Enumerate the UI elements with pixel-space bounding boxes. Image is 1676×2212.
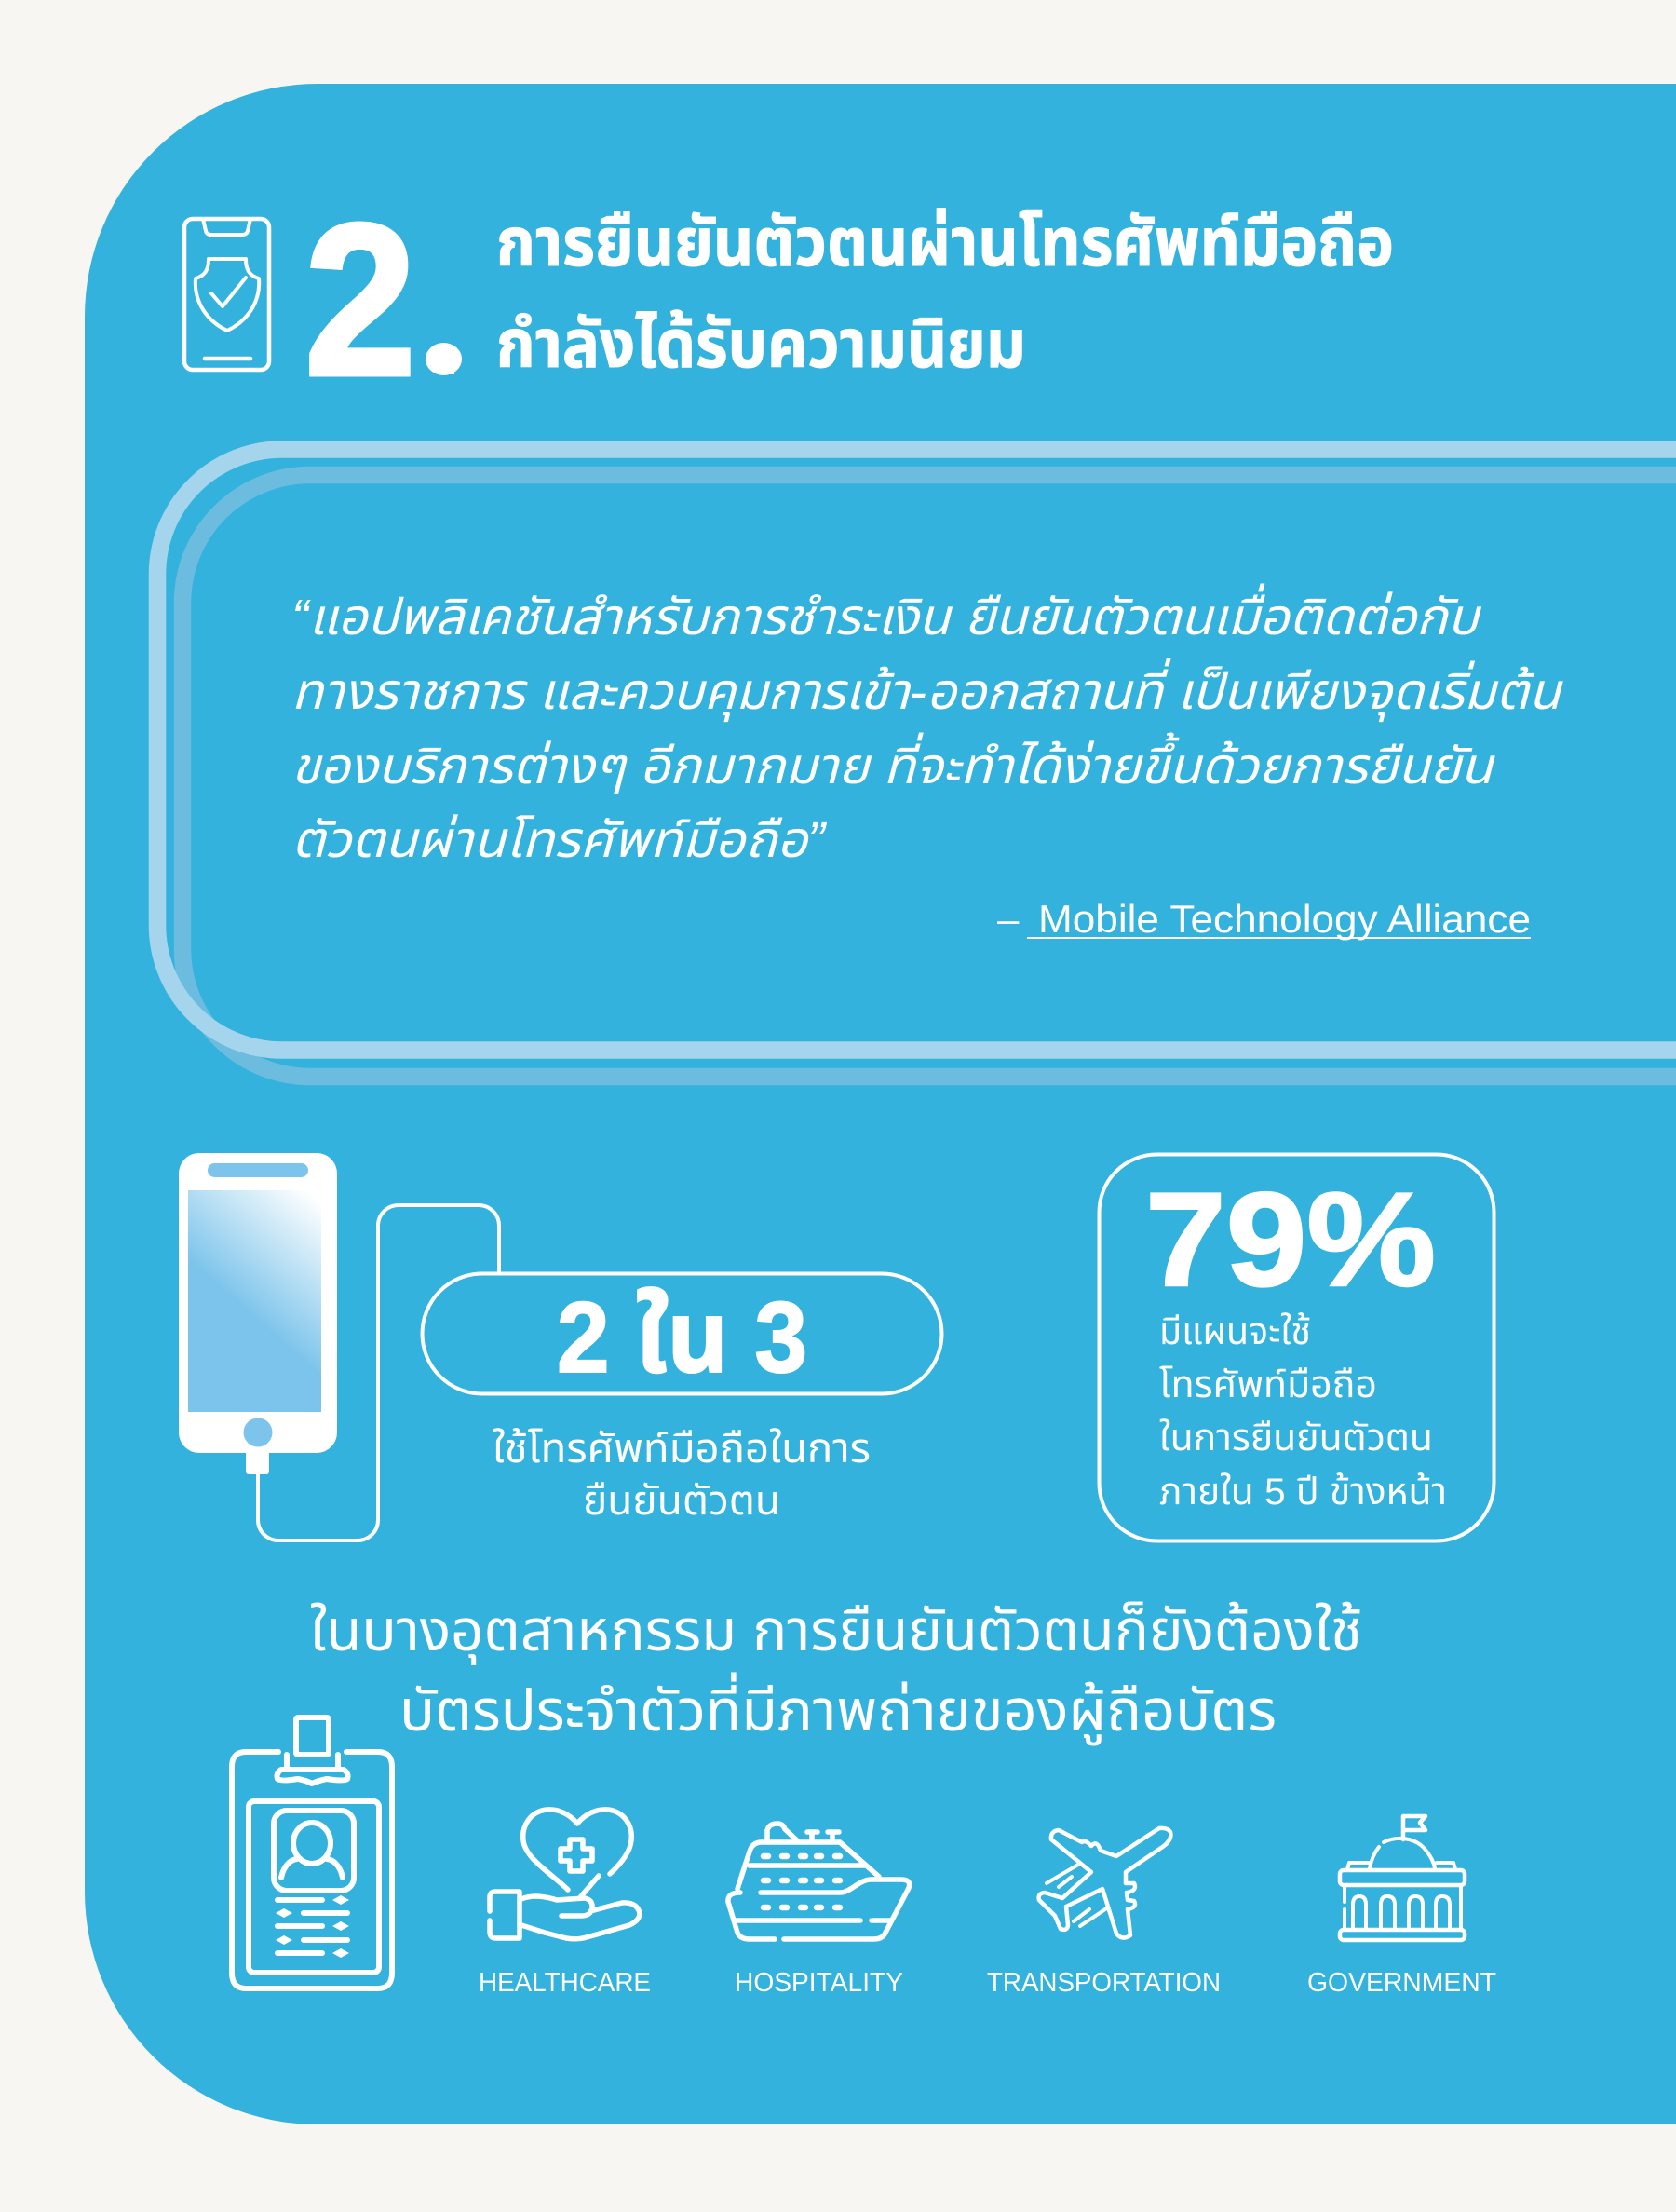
panel: quote frame lines [157, 449, 1676, 1077]
stat pill: 2 in 3 [423, 1274, 942, 1393]
quote text: “แอปพลิเคชันสำหรับการชำระเงิน ยืนยันตัวตนเมื่อติดต่อกับ [291, 583, 1481, 645]
quote text: ตัวตนผ่านโทรศัพท์มือถือ” [291, 812, 827, 868]
icon: ID badge [232, 1717, 392, 1988]
section number 2.: 2 [304, 180, 416, 421]
quote text: ของบริการต่างๆ อีกมากมาย ที่จะทำได้ง่ายขึ้นด้วยการยืนยัน [291, 732, 1495, 794]
heading: industries [310, 1599, 1362, 1746]
title: การยืนยันตัวตนผ่านโทรศัพท์มือถือ [496, 206, 1394, 280]
icon: transportation airplane [1039, 1828, 1170, 1938]
title: กำลังได้รับความนิยม [496, 307, 1026, 382]
heading: industries: ในบางอุตสาหกรรม การยืนยันตัวตนก็ยังต้องใช้ [310, 1599, 1362, 1665]
illustration: phone with charging cable [179, 1153, 499, 1540]
stat caption: ใช้โทรศัพท์มือถือในการ [493, 1426, 871, 1472]
stat pill: 2 in 3: 2 ใน 3 [557, 1281, 807, 1393]
icon: phone with shield [184, 219, 269, 370]
label: healthcare: HEALTHCARE [479, 1968, 651, 1998]
quote attribution: – [997, 897, 1020, 941]
stat card: 79%: มีแผนจะใช้ [1159, 1311, 1311, 1352]
label: transportation: TRANSPORTATION [987, 1968, 1221, 1998]
label: government: GOVERNMENT [1307, 1968, 1496, 1998]
section number 2.: . [433, 282, 462, 397]
icon: hospitality cruise ship [728, 1824, 910, 1939]
stat card: 79%: 79% [1145, 1166, 1436, 1314]
quote text: ทางราชการ และควบคุมการเข้า-ออกสถานที่ เป็นเพียงจุดเริ่มต้น [291, 658, 1563, 723]
heading: industries: บัตรประจำตัวที่มีภาพถ่ายของผู้ถือบัตร [399, 1672, 1277, 1746]
quote text [291, 583, 1563, 868]
stat caption: ยืนยันตัวตน [583, 1478, 780, 1524]
stat card: 79%: ภายใน 5 ปี ข้างหน้า [1159, 1472, 1447, 1513]
quote attribution: Mobile Technology Alliance [1038, 897, 1531, 941]
stat card: 79%: โทรศัพท์มือถือ [1159, 1364, 1377, 1405]
icon: government building [1340, 1816, 1465, 1940]
stat card: 79% [1099, 1155, 1494, 1540]
stat card: 79%: ในการยืนยันตัวตน [1159, 1418, 1433, 1459]
icon: healthcare heart in hand [490, 1810, 640, 1939]
title [496, 206, 1394, 382]
stat caption [493, 1426, 871, 1524]
label: hospitality: HOSPITALITY [735, 1968, 903, 1998]
